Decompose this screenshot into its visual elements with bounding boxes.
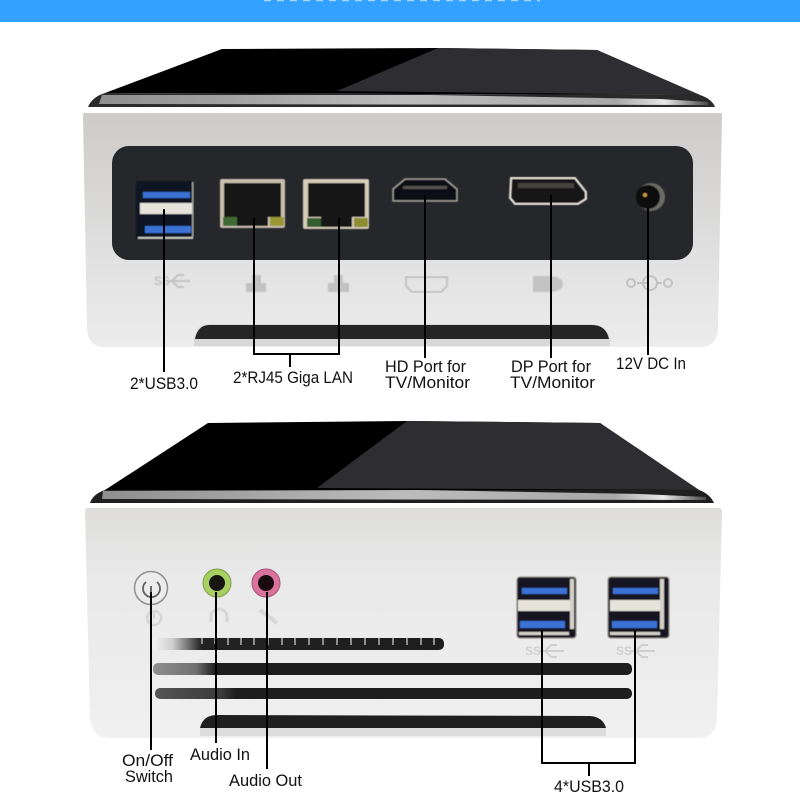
callout: 4*USB3.0: [542, 630, 635, 796]
base slot: [194, 324, 610, 346]
top glossy lid: [105, 48, 700, 95]
top glossy lid: [105, 421, 699, 490]
base slot dark: [200, 715, 606, 728]
lid bevel strip: [90, 490, 714, 503]
callout: HD Port: HD Port for: [385, 357, 466, 376]
callout: Audio In: Audio In: [190, 745, 250, 764]
callout: DP Port: DP Port for: [511, 357, 591, 376]
printed icon: USB left: SS: [525, 644, 541, 658]
vent slots: [152, 638, 632, 699]
RJ45 port 2: [303, 179, 369, 229]
printed icon: USB: [154, 274, 190, 288]
printed icon: headphone: [211, 609, 227, 622]
power button: [134, 572, 168, 604]
aluminium body: [85, 504, 722, 738]
HD port: [393, 179, 457, 201]
printed icon: power polarity: [627, 276, 672, 290]
callout: On/Off Switch: Switch: [125, 767, 173, 786]
base slot dark: [195, 325, 609, 339]
callout: 12V DC In: 12V DC In: [616, 354, 686, 373]
callout: 4*USB3.0: 4*USB3.0: [554, 777, 624, 796]
printed icon: USB: SS: [154, 274, 170, 288]
aluminium body: [83, 108, 722, 347]
callout: 2*RJ45 Giga LAN: 2*RJ45 Giga LAN: [233, 368, 353, 387]
device: rear view: [85, 421, 722, 796]
black port panel: [112, 146, 693, 260]
RJ45 port 1: [220, 179, 285, 228]
printed icon: USB right: SS: [616, 644, 632, 658]
printed icon: USB left: [525, 644, 564, 658]
callout: 2*USB3.0: 2*USB3.0: [130, 374, 198, 393]
callout: On/Off Switch: [122, 592, 173, 786]
device: front view: [83, 48, 722, 393]
USB port pair left: [517, 577, 576, 638]
printed icon: LAN 2: [328, 275, 349, 292]
callout: DP Port: [510, 195, 595, 392]
DP port: [510, 178, 586, 204]
lid bevel strip: [88, 93, 715, 107]
USB port pair right: [608, 577, 669, 638]
callout: HD Port: TV/Monitor: [385, 373, 470, 392]
header banner: [0, 0, 800, 22]
printed icon: USB right: [616, 644, 655, 658]
callout: 2*RJ45 Giga LAN: [233, 218, 353, 387]
audio out jack: [252, 569, 280, 597]
printed icon: LAN 1: [246, 275, 266, 292]
callout: Audio Out: Audio Out: [229, 771, 302, 790]
callout: HD Port: [385, 195, 470, 392]
DC jack: [636, 183, 665, 211]
printed icon: power: [147, 610, 161, 625]
printed icon: microphone: [260, 610, 277, 623]
USB 3.0 port pair: [136, 181, 194, 239]
base slot: [200, 715, 606, 736]
printed icon: DP: [533, 276, 563, 292]
callout: DP Port: TV/Monitor: [510, 373, 595, 392]
callout: On/Off Switch: On/Off: [122, 751, 173, 770]
printed icon: display: [406, 277, 447, 292]
audio in jack: [203, 569, 231, 597]
